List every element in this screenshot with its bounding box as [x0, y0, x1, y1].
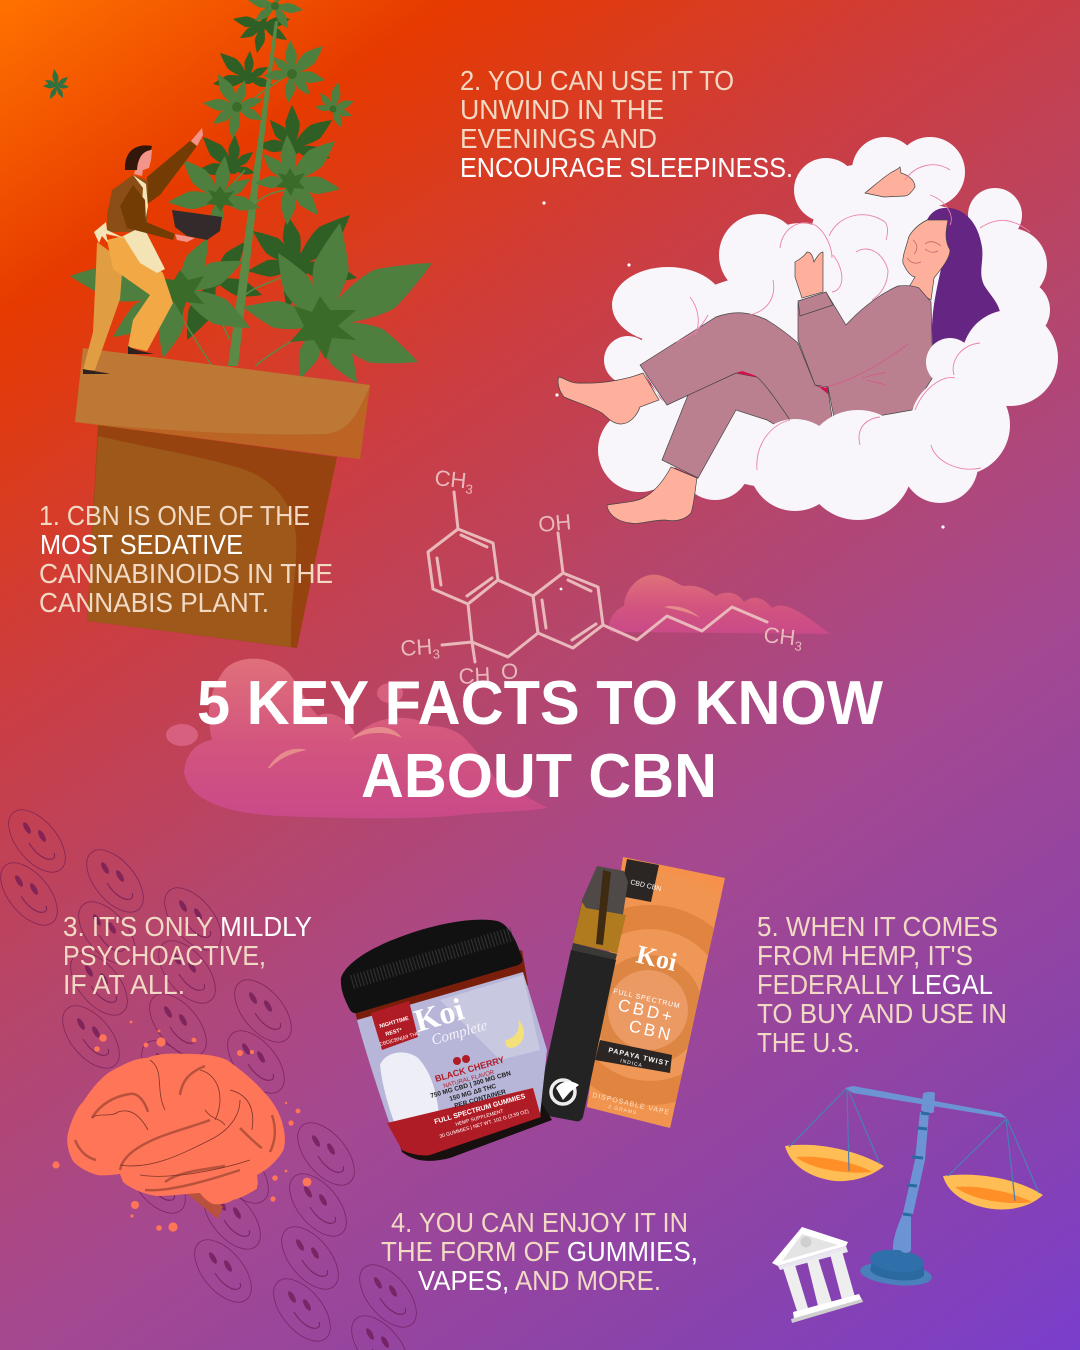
- product: vape box: CBD+: [616, 995, 677, 1027]
- molecule diagram: CH: [458, 662, 491, 689]
- product: gummies jar: CBD|CBN|Δ9 THC: [379, 1031, 421, 1048]
- molecule diagram: [400, 465, 804, 689]
- fact 3 text: [63, 911, 312, 1000]
- fact 1 text: MOST SEDATIVE: [40, 529, 243, 560]
- woman: hair: [927, 208, 1000, 348]
- fact 1 text: CANNABIS PLANT.: [39, 587, 269, 618]
- fact 3 text: IF AT ALL.: [63, 969, 185, 1000]
- product: vape box: INDICA: [620, 1058, 643, 1069]
- title: 5 KEY FACTS TO KNOW: [197, 669, 883, 738]
- woman: body: [798, 286, 933, 428]
- product: gummies jar: PER CONTAINER: [454, 1088, 507, 1110]
- illustration: cannabis plant: [68, 0, 442, 648]
- fact 5 text: 5. WHEN IT COMES: [757, 911, 998, 942]
- fact 3 text: 3. IT'S ONLY MILDLY: [63, 911, 312, 942]
- fact 2 text: 2. YOU CAN USE IT TO: [460, 65, 734, 96]
- fact 4 text: 4. YOU CAN ENJOY IT IN: [391, 1207, 688, 1238]
- illustration: brain: [52, 1021, 311, 1232]
- molecule diagram: 3: [465, 481, 474, 497]
- product: gummies jar: NIGHTTIME: [379, 1016, 410, 1030]
- molecule diagram: 3: [432, 646, 440, 662]
- product: vape box: [587, 857, 725, 1128]
- molecule diagram: CH: [433, 465, 468, 493]
- woman: feet and hands: [558, 373, 659, 424]
- sparkle dots: [542, 169, 945, 590]
- product: gummies jar: BLACK CHERRY: [434, 1055, 505, 1084]
- product: gummies jar: NATURAL FLAVOR: [443, 1069, 496, 1090]
- product: vape box: CBD CBN: [630, 879, 662, 893]
- fact 4 text: THE FORM OF GUMMIES,: [381, 1236, 698, 1267]
- molecule diagram: CH: [762, 622, 797, 650]
- fact 5 text: [757, 911, 1007, 1058]
- molecule diagram: O: [501, 659, 518, 684]
- illustration: balance scale: [772, 1086, 1043, 1323]
- scale: left pan: [785, 1089, 884, 1181]
- fact 5 text: FEDERALLY LEGAL: [757, 969, 993, 1000]
- product: gummies jar: Koi: [410, 990, 468, 1039]
- cloud: pink contour lines: [676, 165, 1030, 470]
- product: vape box: 2 GRAMS: [608, 1104, 638, 1117]
- plant: stem and branches: [178, 21, 307, 366]
- fact 4 text: [381, 1207, 698, 1296]
- product: vape box: CBN: [627, 1016, 675, 1045]
- product: vape box: FULL SPECTRUM: [613, 988, 681, 1010]
- fact 1 text: CANNABINOIDS IN THE: [39, 558, 333, 589]
- scale: classical building: [772, 1227, 863, 1323]
- title: [197, 669, 883, 811]
- woman: neck and face: [903, 220, 950, 300]
- illustration: person harvesting: [83, 128, 222, 374]
- fact 2 text: [460, 65, 793, 183]
- scale: beam and stand: [845, 1086, 1007, 1289]
- cloud: back puffs: [598, 137, 1050, 500]
- product: gummies jar: 30 GUMMIES | NET WT. 102 G (3.59 OZ): [439, 1109, 530, 1140]
- title: ABOUT CBN: [361, 742, 717, 811]
- fact 4 text: VAPES, AND MORE.: [418, 1265, 661, 1296]
- fact 1 text: [39, 500, 333, 618]
- molecule diagram: CH: [400, 634, 433, 661]
- fact 1 text: 1. CBN IS ONE OF THE: [39, 500, 310, 531]
- cloud: front puffs: [749, 310, 1058, 520]
- product: gummies jar: 750 MG CBD | 300 MG CBN: [430, 1070, 512, 1100]
- product: vape box: PAPAYA TWIST: [608, 1047, 670, 1068]
- pink cloud: behind title: [166, 659, 548, 818]
- product: gummies jar: 150 MG Δ8 THC: [449, 1083, 497, 1103]
- fact 3 text: PSYCHOACTIVE,: [63, 940, 266, 971]
- fact 5 text: FROM HEMP, IT'S: [757, 940, 973, 971]
- plant: light front leaves: [68, 0, 442, 389]
- molecule diagram: OH: [537, 509, 572, 537]
- product: gummies jar: HEMP SUPPLEMENT: [455, 1108, 504, 1128]
- product: gummies jar: FULL SPECTRUM GUMMIES: [434, 1093, 527, 1126]
- product: gummies jar: [341, 920, 552, 1161]
- fact 5 text: TO BUY AND USE IN: [757, 998, 1007, 1029]
- product: gummies jar: REST*: [385, 1027, 404, 1038]
- fact 2 text: ENCOURAGE SLEEPINESS.: [460, 152, 793, 183]
- plant pot: [75, 348, 370, 648]
- product: vape pen: [537, 866, 628, 1121]
- scale: right pan: [943, 1119, 1043, 1209]
- product: vape box: Koi: [634, 940, 680, 977]
- product: gummies jar: Complete: [430, 1018, 490, 1049]
- smiley pattern: [0, 800, 427, 1350]
- fact 2 text: EVENINGS AND: [460, 123, 657, 154]
- illustration: sleeping woman on cloud: [558, 137, 1058, 523]
- fact 5 text: THE U.S.: [757, 1027, 860, 1058]
- pink cloud: by molecule: [609, 575, 830, 634]
- plant: dark back leaves: [177, 5, 359, 345]
- small leaf icon: [43, 68, 70, 100]
- fact 2 text: UNWIND IN THE: [460, 94, 664, 125]
- woman: legs: [662, 373, 833, 478]
- product: vape box: DISPOSABLE VAPE: [592, 1092, 671, 1117]
- molecule diagram: 3: [794, 638, 803, 654]
